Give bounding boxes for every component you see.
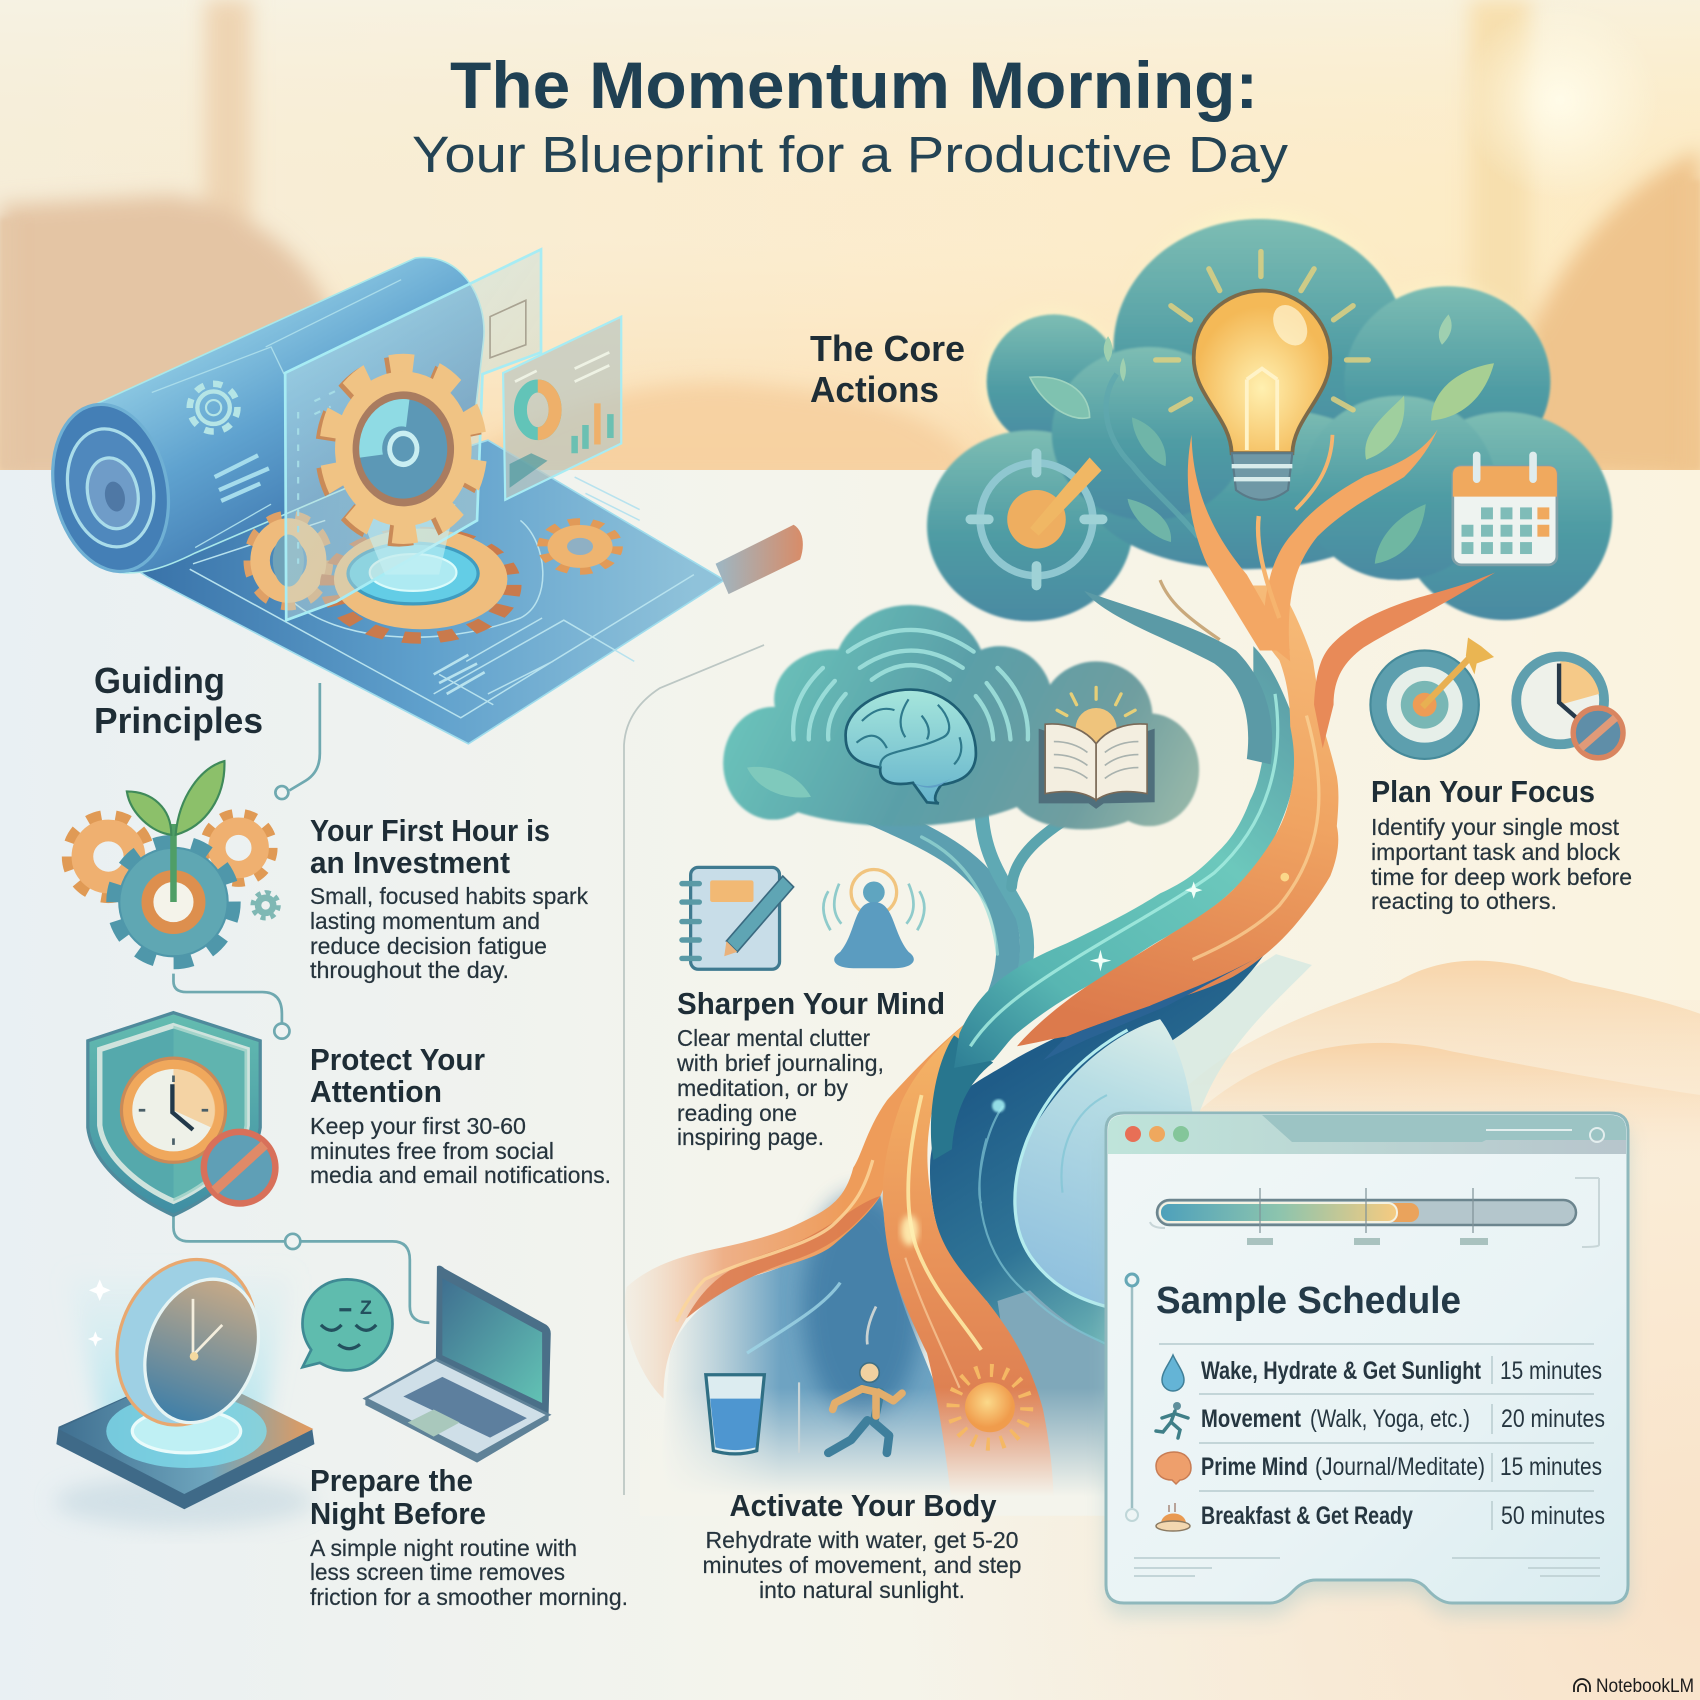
text: the core actions: The Core xyxy=(810,328,965,369)
illustration: flowing tree roots and river xyxy=(625,429,1495,1516)
leaves in upper canopy xyxy=(1030,314,1494,564)
text: your first hour is an investment xyxy=(310,813,588,983)
icon: sleeping chat bubble: Z xyxy=(360,1297,372,1319)
row: movement: 20 minutes xyxy=(1501,1405,1605,1433)
text: your first hour is an investment: throughout the day. xyxy=(310,957,509,983)
text: activate your body: Rehydrate with water, get 5-20 xyxy=(706,1527,1018,1553)
text: sharpen your mind: meditation, or by xyxy=(677,1075,848,1101)
text: sharpen your mind: reading one xyxy=(677,1100,797,1126)
icon: notebook and pencil xyxy=(682,867,794,969)
text: protect your attention: Keep your first 30-60 xyxy=(310,1113,526,1139)
row: prime mind: (Journal/Meditate) xyxy=(1315,1453,1485,1481)
text: plan your focus: Plan Your Focus xyxy=(1371,774,1595,809)
row: prime mind: 15 minutes xyxy=(1500,1453,1602,1481)
text: prepare the night before xyxy=(310,1463,628,1610)
icon: sprout and gears xyxy=(69,761,278,961)
text: your first hour is an investment: Small, focused habits spark xyxy=(310,883,588,909)
row: breakfast and get ready xyxy=(1156,1502,1605,1531)
text: your first hour is an investment: reduce decision fatigue xyxy=(310,933,547,959)
text: protect your attention: Attention xyxy=(310,1074,442,1109)
text: prepare the night before: Night Before xyxy=(310,1496,486,1531)
text: sharpen your mind: Sharpen Your Mind xyxy=(677,986,945,1021)
text: activate your body xyxy=(702,1488,1022,1603)
icon: calendar xyxy=(1453,455,1557,565)
icon: laptop xyxy=(365,1266,551,1463)
icon: sleeping chat bubble xyxy=(302,1279,392,1370)
text: the core actions xyxy=(810,328,965,410)
text: plan your focus: time for deep work before xyxy=(1371,864,1632,890)
icon: sun xyxy=(953,1370,1027,1444)
icon: open book with sun xyxy=(1039,687,1155,809)
row: breakfast and get ready: 50 minutes xyxy=(1501,1502,1605,1530)
illustration: lower tree canopy xyxy=(723,605,1199,829)
row: movement: (Walk, Yoga, etc.) xyxy=(1310,1405,1470,1433)
heading: guiding principles: Guiding xyxy=(94,660,225,701)
text: prepare the night before: friction for a smoother morning. xyxy=(310,1584,628,1610)
row: wake, hydrate and get sunlight: Wake, Hydrate & Get Sunlight xyxy=(1201,1357,1482,1385)
icon: meditating figure xyxy=(823,870,924,968)
text: prepare the night before: less screen time removes xyxy=(310,1559,565,1585)
title: Your Blueprint for a Productive Day xyxy=(412,126,1289,183)
icon: shield with clock xyxy=(88,1013,275,1215)
icon: lightbulb xyxy=(1156,252,1368,500)
heading: guiding principles xyxy=(94,660,263,741)
text: sharpen your mind: Clear mental clutter xyxy=(677,1025,870,1051)
text: protect your attention xyxy=(310,1042,611,1188)
icon: brain xyxy=(846,690,976,803)
text: sharpen your mind: with brief journaling, xyxy=(676,1050,884,1076)
heading: sample schedule: Sample Schedule xyxy=(1156,1280,1461,1322)
icon: holographic clock on platform xyxy=(54,1240,314,1528)
panel: sample schedule window xyxy=(1106,1113,1628,1615)
text: protect your attention: Protect Your xyxy=(310,1042,485,1077)
icon: running figure xyxy=(828,1363,902,1453)
text: prepare the night before: Prepare the xyxy=(310,1463,473,1498)
illustration: upper tree canopy xyxy=(927,211,1612,621)
row: prime mind xyxy=(1156,1452,1602,1484)
illustration: blueprint roll with gears xyxy=(38,249,803,744)
window title bar xyxy=(1108,1115,1626,1154)
text: protect your attention: media and email notifications. xyxy=(310,1162,611,1188)
text: sharpen your mind: inspiring page. xyxy=(677,1124,824,1150)
text: your first hour is an investment: Your First Hour is xyxy=(310,813,550,848)
divider line between columns xyxy=(624,645,764,1495)
progress timeline bar xyxy=(1150,1178,1599,1247)
text: plan your focus: important task and block xyxy=(1371,839,1620,865)
row: prime mind: Prime Mind xyxy=(1201,1453,1308,1481)
icon: glass of water xyxy=(706,1375,799,1454)
icons: target and clock for plan your focus xyxy=(1370,638,1623,759)
schedule row lines xyxy=(1134,1344,1600,1576)
text: protect your attention: minutes free from social xyxy=(310,1138,554,1164)
text: activate your body: minutes of movement, and step xyxy=(702,1552,1022,1578)
illustration: distant hills xyxy=(1149,961,1700,1182)
text: the core actions: Actions xyxy=(810,369,939,410)
row: wake, hydrate and get sunlight xyxy=(1162,1355,1602,1391)
row: movement xyxy=(1156,1402,1605,1438)
text: activate your body: Activate Your Body xyxy=(730,1488,997,1523)
text: activate your body: into natural sunlight. xyxy=(759,1577,965,1603)
side rail xyxy=(1126,1274,1138,1521)
text: sharpen your mind xyxy=(676,986,945,1150)
text: plan your focus: Identify your single most xyxy=(1371,814,1619,840)
connector lines between principles xyxy=(173,683,429,1323)
text: plan your focus: reacting to others. xyxy=(1371,888,1557,914)
icon: target with pencil in canopy xyxy=(970,453,1103,585)
text: your first hour is an investment: an Investment xyxy=(310,845,510,880)
title xyxy=(412,48,1289,183)
text: your first hour is an investment: lasting momentum and xyxy=(310,908,540,934)
row: wake, hydrate and get sunlight: 15 minutes xyxy=(1500,1357,1602,1385)
text: plan your focus xyxy=(1371,774,1632,914)
row: movement: Movement xyxy=(1201,1405,1302,1433)
row: breakfast and get ready: Breakfast & Get Ready xyxy=(1201,1502,1413,1530)
text: prepare the night before: A simple night routine with xyxy=(310,1535,577,1561)
title: The Momentum Morning: xyxy=(450,48,1258,122)
illustration: lower tree trunk branches xyxy=(867,802,1076,1041)
heading: guiding principles: Principles xyxy=(94,700,263,741)
